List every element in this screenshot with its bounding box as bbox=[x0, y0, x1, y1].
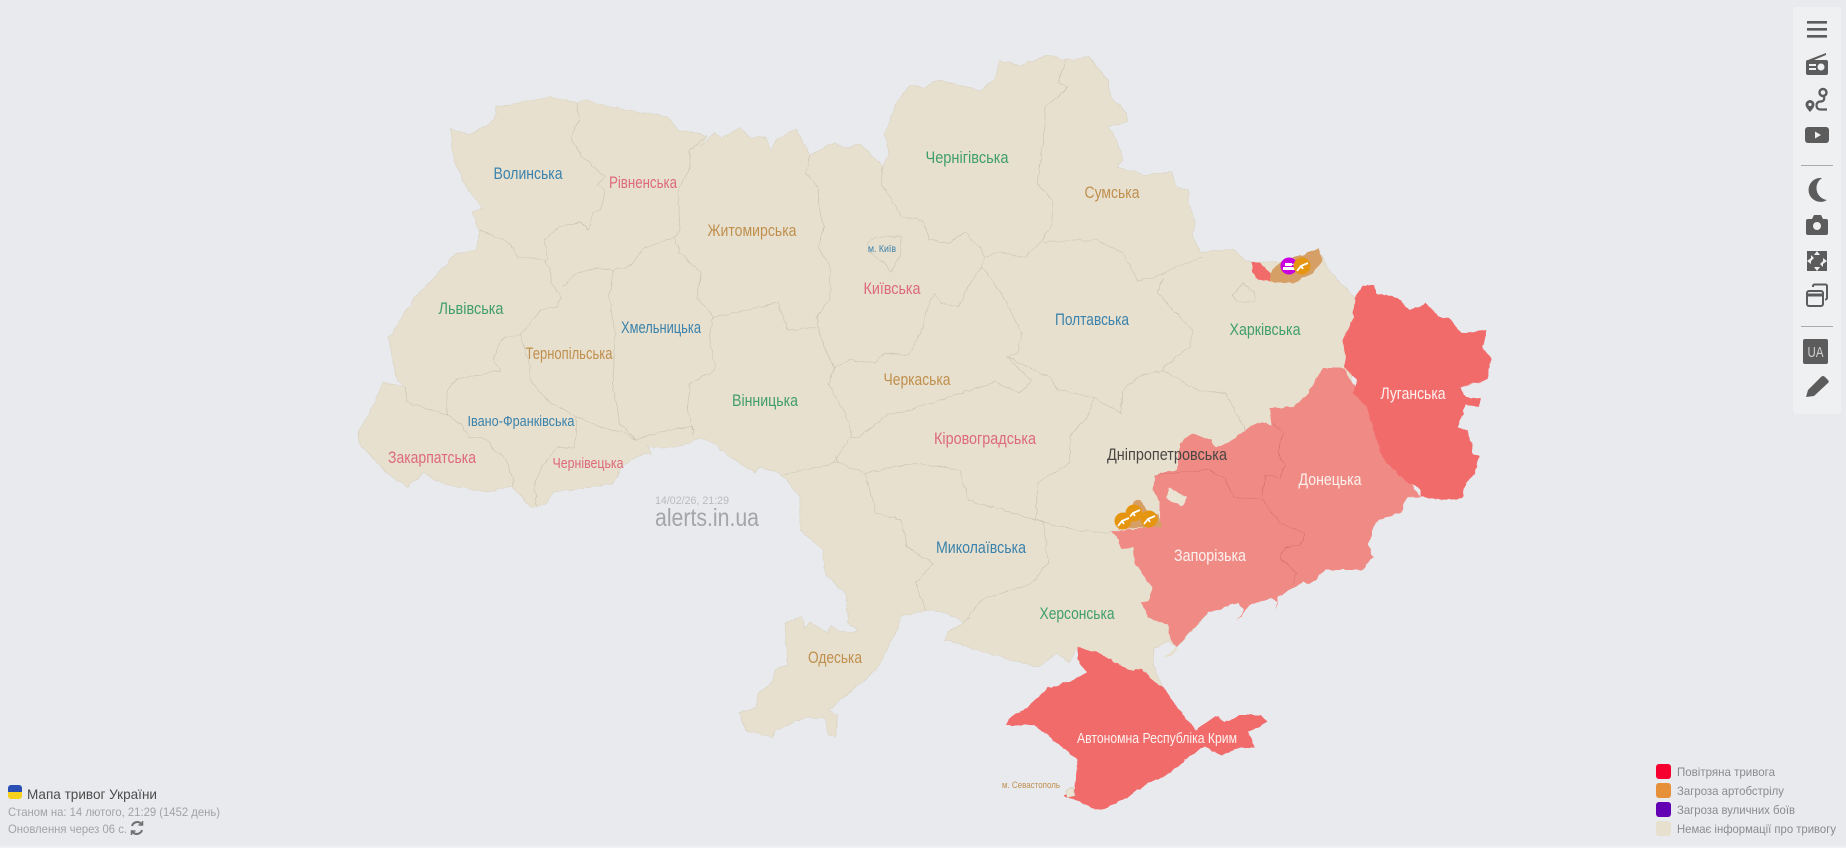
region: Zaporizhzhia, Donetsk and eastern Dnipropetrovsk alert bbox=[1112, 368, 1420, 647]
status date: Станом на: 14 лютого, 21:29 (1452 день) bbox=[8, 805, 220, 819]
watermark timestamp: 14/02/26, 21:29 bbox=[655, 495, 729, 507]
icon: menu bbox=[1807, 21, 1827, 38]
label: Одеська: Одеська bbox=[808, 648, 862, 667]
icon: moon bbox=[1809, 178, 1827, 202]
label: Черкаська: Черкаська bbox=[884, 370, 951, 389]
label: м. Севастополь: м. Севастополь bbox=[1002, 780, 1060, 791]
label: Чернігівська: Чернігівська bbox=[926, 148, 1009, 167]
label: Миколаївська: Миколаївська bbox=[936, 538, 1026, 557]
label: Чернівецька: Чернівецька bbox=[552, 455, 624, 472]
label: Сумська: Сумська bbox=[1084, 183, 1140, 202]
label: Харківська: Харківська bbox=[1230, 320, 1301, 339]
icon: fullscreen bbox=[1807, 251, 1827, 271]
label: м. Київ: м. Київ bbox=[868, 244, 896, 255]
update countdown: Оновлення через 06 с. bbox=[8, 822, 127, 836]
icon: pencil bbox=[1806, 376, 1829, 397]
legend: air alert: Повітряна тривога bbox=[1677, 765, 1775, 779]
label: Донецька: Донецька bbox=[1298, 470, 1362, 489]
title block bbox=[8, 785, 220, 836]
label: Кіровоградська: Кіровоградська bbox=[934, 429, 1036, 448]
label: Автономна Республіка Крим: Автономна Республіка Крим bbox=[1077, 730, 1237, 747]
legend bbox=[1656, 764, 1836, 836]
map of Ukraine bbox=[358, 55, 1491, 810]
icon: windows bbox=[1807, 284, 1827, 306]
label: Івано-Франківська: Івано-Франківська bbox=[468, 413, 575, 430]
toolbar panel bbox=[1793, 7, 1841, 414]
icon: camera bbox=[1806, 215, 1828, 235]
language switch bbox=[1803, 339, 1828, 364]
region: Crimea alert bbox=[1006, 647, 1267, 810]
label: Полтавська: Полтавська bbox=[1055, 310, 1129, 329]
Sevastopol bbox=[1065, 788, 1075, 797]
label: Хмельницька: Хмельницька bbox=[621, 318, 701, 337]
land: regions with no alert bbox=[358, 55, 1365, 737]
label: Рівненська: Рівненська bbox=[609, 173, 677, 192]
icon: Ukrainian flag bbox=[8, 785, 22, 799]
hole in Zaporizhzhia region bbox=[1165, 488, 1187, 506]
label: Волинська: Волинська bbox=[494, 164, 563, 183]
Arabat spit bbox=[1164, 648, 1178, 658]
region: Luhansk alert bbox=[1342, 285, 1491, 500]
label: Житомирська: Житомирська bbox=[708, 221, 797, 240]
label: Вінницька: Вінницька bbox=[732, 391, 798, 410]
label: Запорізька: Запорізька bbox=[1174, 546, 1246, 565]
Kharkiv border artillery area bbox=[1270, 248, 1323, 283]
artillery marker Dnipropetrovsk south bbox=[1114, 512, 1132, 530]
label: Львівська: Львівська bbox=[438, 299, 504, 318]
label: Київська: Київська bbox=[864, 279, 921, 298]
legend: street fighting: Загроза вуличних боїв bbox=[1677, 803, 1795, 817]
Dnipropetrovsk artillery area bbox=[1117, 500, 1162, 530]
legend: artillery threat: Загроза артобстрілу bbox=[1677, 784, 1784, 798]
label: Тернопільська: Тернопільська bbox=[526, 344, 613, 363]
icon: refresh bbox=[132, 821, 142, 835]
artillery marker Dnipropetrovsk west bbox=[1126, 504, 1142, 522]
icon: radio bbox=[1806, 53, 1828, 75]
icon: video bbox=[1805, 127, 1829, 143]
icon: route bbox=[1806, 89, 1827, 112]
label: Дніпропетровська: Дніпропетровська bbox=[1107, 445, 1227, 464]
label: Луганська: Луганська bbox=[1380, 384, 1446, 403]
street fighting marker bbox=[1280, 258, 1298, 274]
Kharkiv border alert area bbox=[1252, 262, 1270, 282]
artillery marker Kharkiv bbox=[1294, 258, 1310, 274]
legend: no information: Немає інформації про тривогу bbox=[1677, 822, 1836, 836]
label: Херсонська: Херсонська bbox=[1040, 604, 1115, 623]
label: Закарпатська: Закарпатська bbox=[388, 448, 476, 467]
watermark site name: alerts.in.ua bbox=[655, 504, 759, 532]
map title: Мапа тривог України bbox=[27, 786, 157, 802]
artillery marker Dnipropetrovsk east bbox=[1140, 510, 1158, 528]
language switch: UA bbox=[1808, 344, 1824, 361]
